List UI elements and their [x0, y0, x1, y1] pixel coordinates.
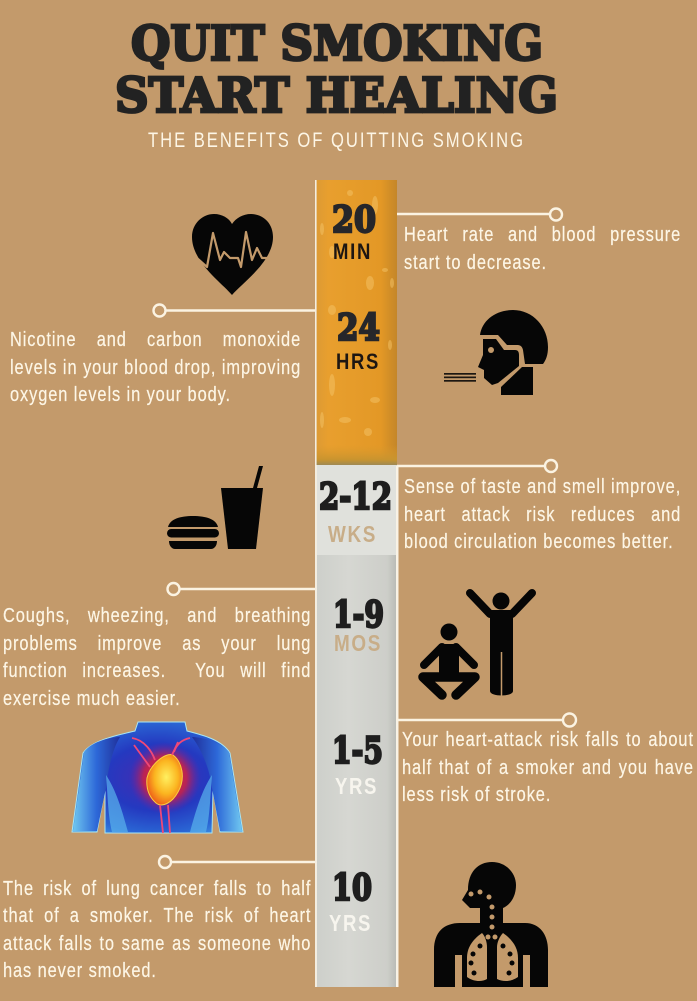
text: 10 yrs benefit: [3, 878, 311, 982]
left edge line: [315, 180, 317, 470]
time label: 1-5 YRS: [332, 730, 383, 799]
time label: 1-9 MOS: 1-9: [333, 594, 384, 636]
text: 1-9 mos benefit: [3, 605, 311, 710]
icon: head and lungs: [434, 862, 548, 987]
time label: 20 MIN: 20: [332, 199, 376, 241]
illustration: glowing heart in torso: [72, 722, 243, 833]
time label: 1-9 MOS: [333, 594, 384, 656]
time label: 2-12 WKS: [319, 476, 392, 547]
connector: 2-12 wks: [397, 460, 557, 472]
text: 24 hrs benefit: levels in your blood drop, improving: [10, 357, 301, 379]
connector: 10 yrs: [159, 856, 315, 868]
title: START HEALING: [115, 68, 558, 124]
icon: exercising people: [423, 592, 532, 696]
time label: 1-9 MOS: MOS: [334, 630, 382, 656]
connector: 20 min: [397, 208, 562, 220]
text: 2-12 wks benefit: blood circulation becomes better.: [404, 531, 674, 553]
connector: 1-5 yrs: [397, 714, 576, 726]
text: 10 yrs benefit: has never smoked.: [3, 960, 157, 982]
text: 24 hrs benefit: Nicotine and carbon monoxide: [10, 329, 301, 351]
time label: 2-12 WKS: WKS: [328, 521, 377, 547]
time label: 10 YRS: [329, 867, 372, 936]
text: 24 hrs benefit: oxygen levels in your body.: [10, 384, 231, 406]
icon: head with breath: [444, 310, 548, 395]
text: 1-5 yrs benefit: less risk of stroke.: [402, 784, 551, 806]
connector: 24 hrs: [154, 304, 315, 316]
text: 24 hrs benefit: [10, 329, 301, 406]
text: 10 yrs benefit: that of a smoker. The risk of heart: [3, 905, 311, 927]
text: 2-12 wks benefit: [404, 476, 681, 553]
title: QUIT SMOKING: [131, 16, 543, 72]
text: 2-12 wks benefit: heart attack risk reduces and: [404, 504, 681, 526]
icon: burger and drink: [167, 466, 263, 549]
text: 20 min benefit: start to decrease.: [404, 252, 547, 274]
icon: heart with pulse: [192, 214, 273, 295]
time label: 1-5 YRS: YRS: [335, 773, 378, 799]
cigarette timeline: [315, 180, 398, 987]
connector: 1-9 mos: [168, 583, 315, 595]
text: 20 min benefit: [404, 224, 681, 274]
text: 1-5 yrs benefit: half that of a smoker and you have: [402, 757, 694, 779]
time label: 10 YRS: 10: [332, 867, 372, 909]
subtitle: THE BENEFITS OF QUITTING SMOKING: [148, 129, 525, 152]
text: 2-12 wks benefit: Sense of taste and smell improve,: [404, 476, 681, 498]
text: 1-9 mos benefit: function increases. You will find: [3, 660, 311, 682]
time label: 24 HRS: HRS: [336, 349, 380, 374]
text: 10 yrs benefit: The risk of lung cancer falls to half: [3, 878, 311, 900]
time label: 24 HRS: 24: [337, 307, 380, 349]
time label: 1-5 YRS: 1-5: [332, 730, 383, 772]
text: 1-5 yrs benefit: [402, 729, 694, 806]
title: [115, 16, 558, 124]
time label: 20 MIN: MIN: [333, 239, 372, 264]
text: 1-5 yrs benefit: Your heart-attack risk falls to about: [402, 729, 694, 751]
time label: 10 YRS: YRS: [329, 910, 372, 936]
text: 1-9 mos benefit: problems improve as your lung: [3, 633, 311, 655]
text: 1-9 mos benefit: Coughs, wheezing, and breathing: [3, 605, 311, 627]
text: 20 min benefit: Heart rate and blood pressure: [404, 224, 681, 246]
time label: 20 MIN: [332, 199, 376, 264]
time label: 24 HRS: [336, 307, 380, 374]
text: 10 yrs benefit: attack falls to same as someone who: [3, 933, 311, 955]
time label: 2-12 WKS: 2-12: [319, 476, 392, 518]
text: 1-9 mos benefit: exercise much easier.: [3, 688, 181, 710]
